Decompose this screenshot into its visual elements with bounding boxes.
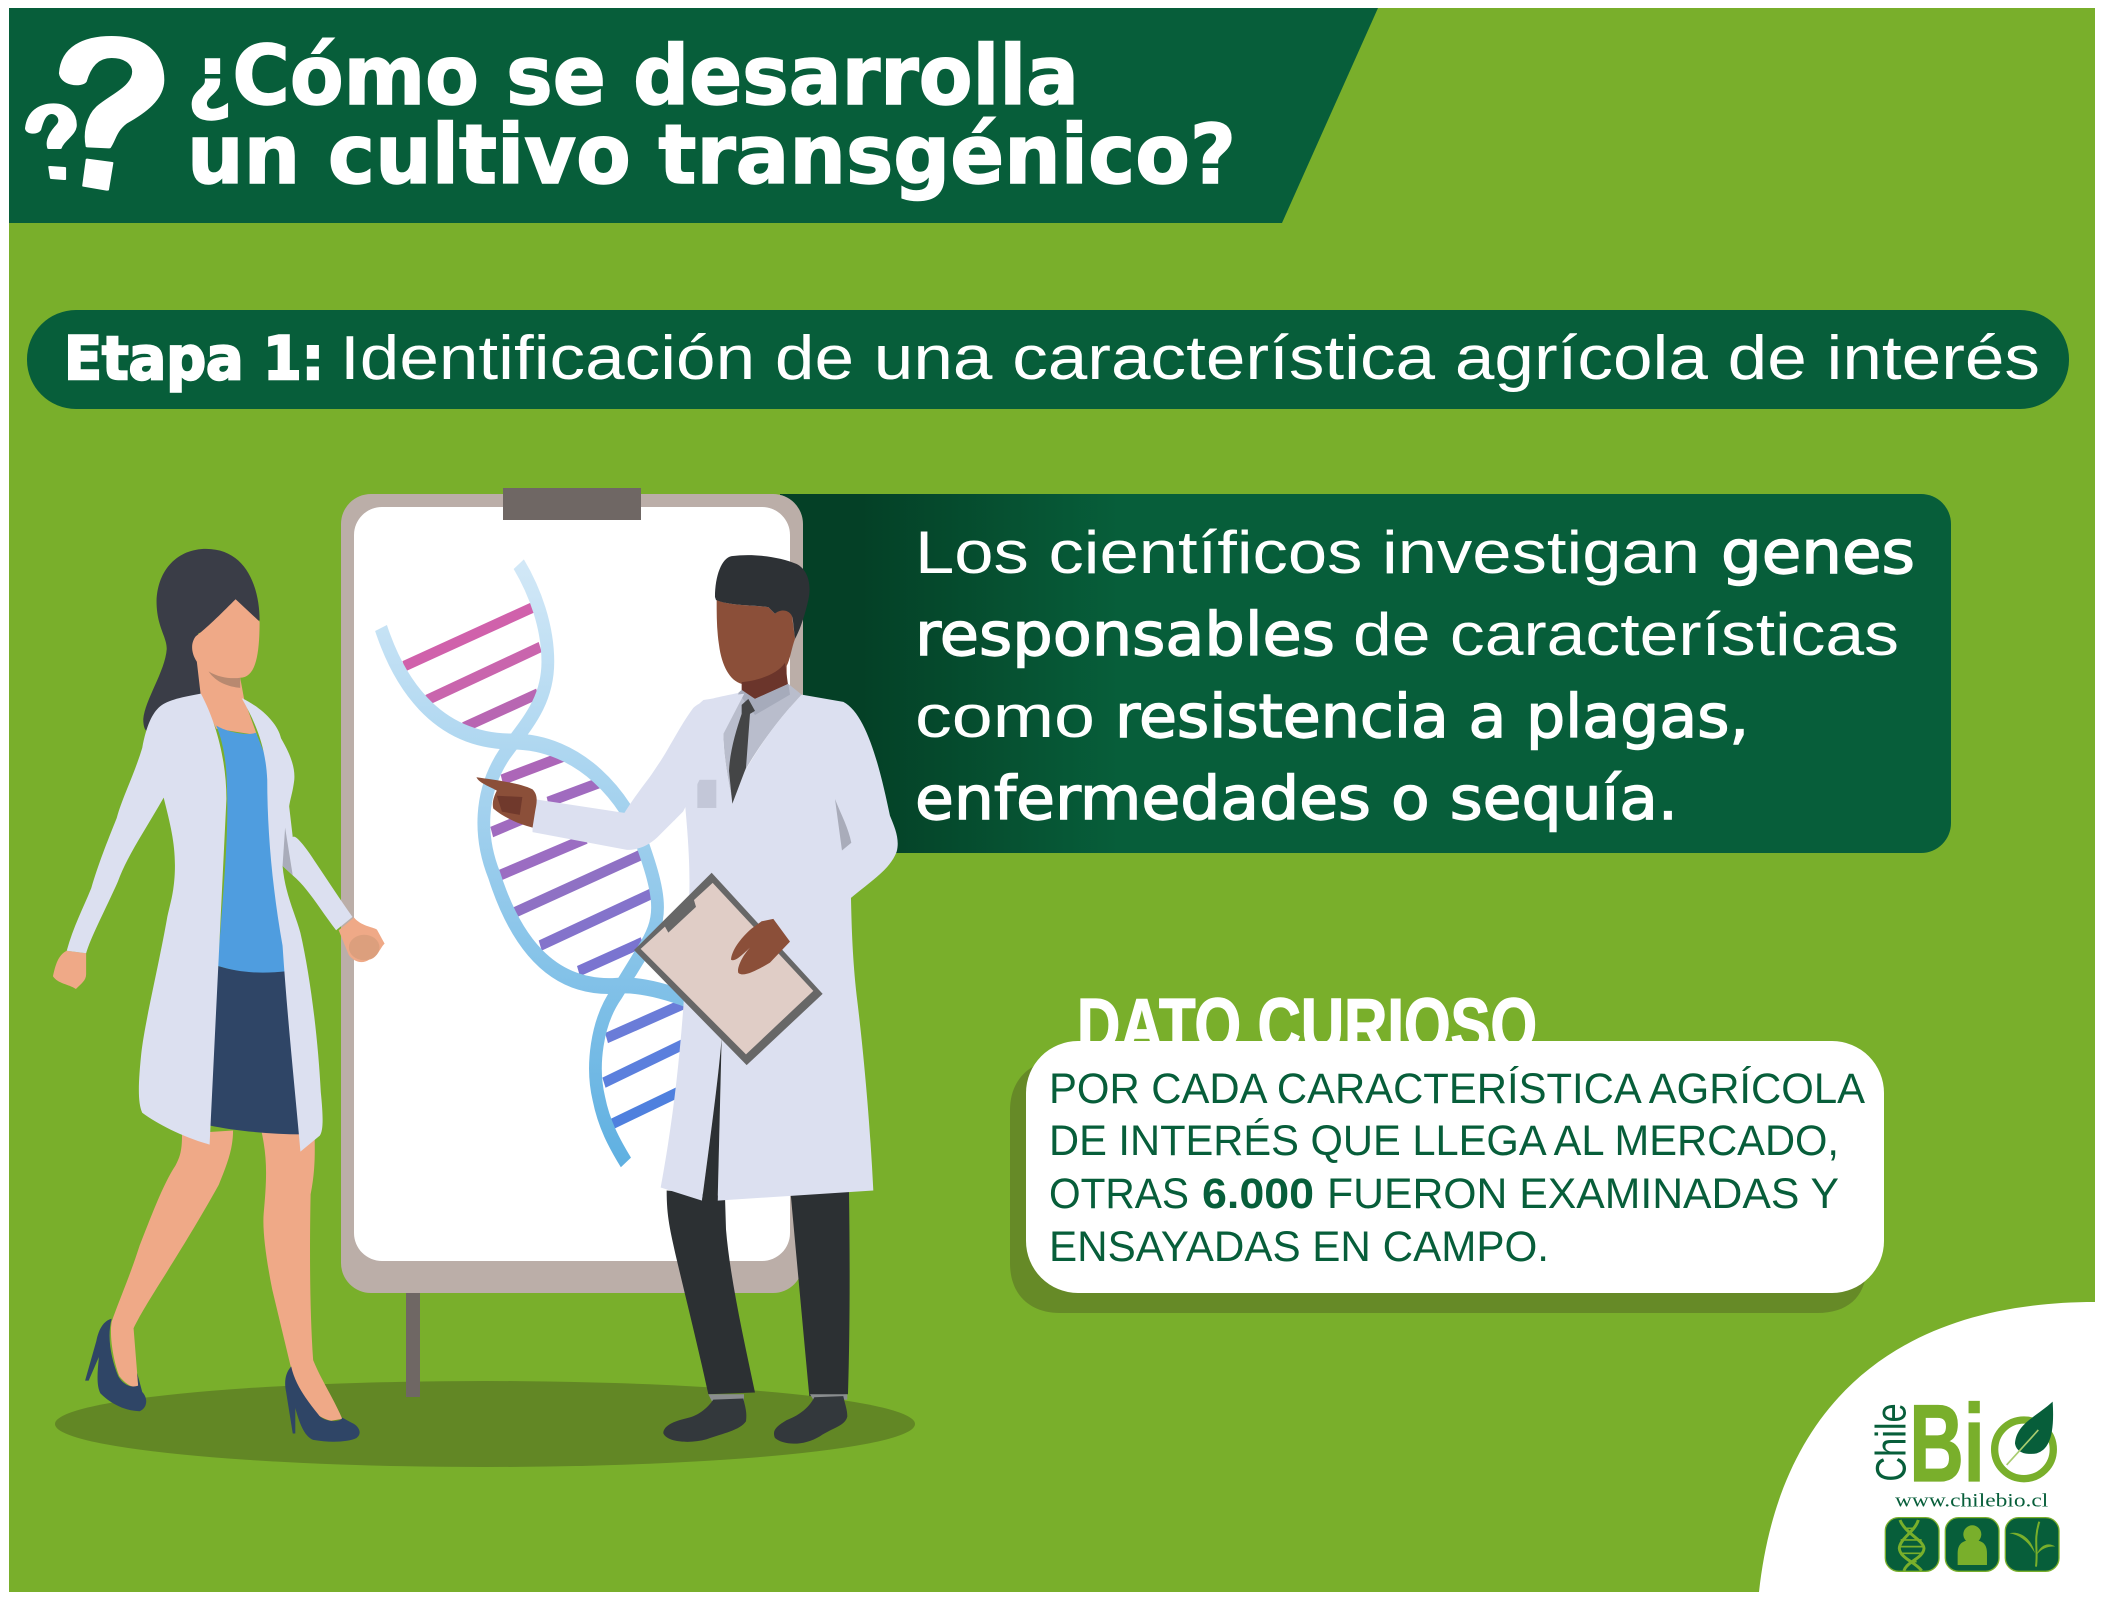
callout: dato curioso: FUERON EXAMINADAS Y: [1327, 1170, 1839, 1218]
header banner: [9, 8, 1378, 223]
title: ¿Cómo se desarrolla: [187, 29, 1079, 124]
man scientist: [476, 555, 898, 1444]
icon: DNA: [1885, 1518, 1939, 1571]
logo: ChileBio: [1868, 1383, 2059, 1571]
stage heading pill: Etapa 1:: [64, 324, 324, 394]
presentation board: [341, 488, 803, 1397]
logo: ChileBio: Bi: [1909, 1383, 1985, 1505]
stage heading pill: Identificación de una característica agrícola de interés: [340, 324, 2040, 393]
icon: question marks: [27, 37, 163, 190]
callout: dato curioso: ENSAYADAS EN CAMPO.: [1049, 1223, 1549, 1271]
stage heading pill: [27, 310, 2069, 409]
logo: ChileBio: www.chilebio.cl: [1895, 1491, 2048, 1512]
logo: ChileBio: Chile: [1868, 1403, 1916, 1482]
panel: scientists explanation: resistencia a plagas,: [1115, 682, 1749, 752]
panel: scientists explanation: enfermedades o sequía.: [915, 764, 1678, 834]
callout: dato curioso: POR CADA CARACTERÍSTICA AGRÍCOLA: [1049, 1065, 1865, 1113]
title: un cultivo transgénico?: [187, 108, 1236, 203]
panel: scientists explanation: [780, 494, 1951, 853]
icon: person: [1945, 1518, 1999, 1571]
callout: dato curioso: OTRAS: [1049, 1170, 1189, 1218]
ground shadow: [55, 1381, 915, 1467]
callout: dato curioso: DATO CURIOSO: [1077, 983, 1537, 1067]
woman scientist: [53, 549, 385, 1442]
callout: dato curioso: [1010, 983, 1884, 1313]
icon: plant: [2005, 1518, 2059, 1571]
panel: scientists explanation: Los científicos investigan: [915, 519, 1700, 586]
panel: scientists explanation: como: [915, 683, 1095, 750]
DNA helix: [381, 564, 688, 1162]
callout: dato curioso: 6.000: [1202, 1170, 1314, 1218]
title: [187, 29, 1236, 203]
panel: scientists explanation: genes: [1721, 518, 1915, 588]
panel: scientists explanation: responsables: [915, 600, 1335, 670]
callout: dato curioso: DE INTERÉS QUE LLEGA AL MERCADO,: [1049, 1117, 1839, 1165]
panel: scientists explanation: de características: [1353, 601, 1899, 668]
